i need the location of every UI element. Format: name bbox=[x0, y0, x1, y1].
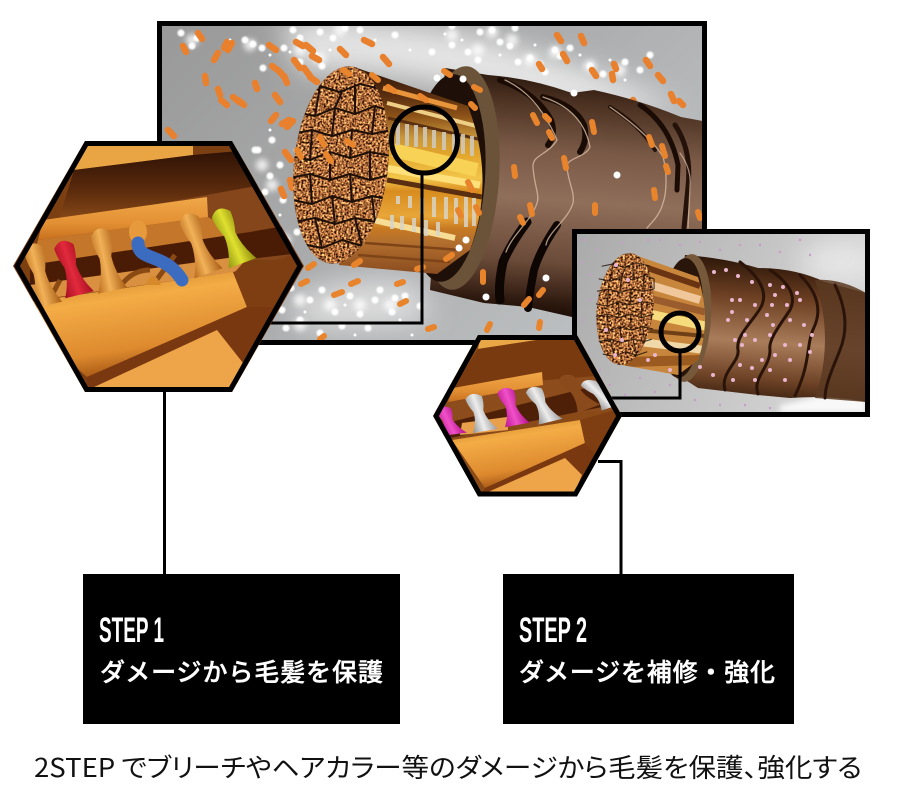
top gold band bbox=[74, 143, 193, 170]
connector: inset lens to hexagon 2 bbox=[610, 350, 680, 398]
lower gold bbox=[452, 420, 585, 488]
cuticle folds bbox=[499, 80, 690, 308]
upper rail bbox=[38, 197, 208, 240]
step 2 label: STEP 2 bbox=[519, 611, 587, 650]
inset hair body bbox=[670, 255, 866, 402]
inset frame bbox=[574, 232, 868, 414]
panel background bbox=[160, 25, 704, 342]
hair body bbox=[430, 68, 708, 317]
bottom light bbox=[486, 458, 582, 496]
panel frame bbox=[160, 24, 704, 342]
lower tiles bbox=[30, 258, 243, 297]
small white sparkles bbox=[230, 34, 625, 335]
silver proteins bbox=[460, 392, 498, 433]
pillars bbox=[552, 371, 600, 413]
pillars bbox=[25, 243, 62, 308]
yellow protein bbox=[212, 208, 256, 268]
inset ring bbox=[676, 254, 712, 382]
hexagon frame bbox=[17, 144, 300, 390]
inset pink particles bbox=[606, 265, 812, 380]
white sparkles bbox=[181, 26, 650, 333]
protein teeth upper bbox=[398, 123, 472, 156]
inset panel: repaired hair bbox=[572, 229, 880, 417]
slot bbox=[443, 385, 612, 438]
cuticle ring bbox=[438, 66, 500, 290]
main hair illustration panel bbox=[157, 19, 708, 345]
red protein bbox=[54, 240, 94, 298]
hexagon: step 1 magnified view bbox=[10, 138, 310, 394]
inset cross section bbox=[591, 250, 659, 368]
rail underside bbox=[37, 217, 236, 263]
orange particles bbox=[168, 33, 694, 196]
tiles bbox=[460, 417, 508, 435]
connector: hexagon 1 to step 1 box bbox=[163, 390, 166, 576]
dark slot bbox=[30, 225, 292, 285]
ring inner opening bbox=[426, 74, 486, 282]
bottom light panel bbox=[92, 330, 243, 392]
sparkle glow bbox=[192, 30, 620, 325]
inset core bbox=[615, 250, 715, 380]
connector: main lens to step 1 hexagon bbox=[265, 172, 422, 323]
hair core bbox=[339, 67, 482, 274]
step 2 box bbox=[503, 574, 794, 724]
lens circle bbox=[392, 107, 458, 173]
protein teeth lower bbox=[392, 196, 474, 236]
pink proteins bbox=[429, 405, 467, 436]
bottom white glitter bbox=[778, 397, 865, 412]
step 1 box bbox=[83, 574, 400, 724]
inset lens bbox=[661, 313, 699, 351]
step 1 label: STEP 1 bbox=[99, 611, 164, 650]
upper rail bbox=[448, 372, 543, 402]
hair cross section bbox=[293, 66, 390, 264]
lower right brown bbox=[233, 254, 298, 307]
inset cuticle folds bbox=[724, 262, 845, 398]
connector: hexagon 2 to step 2 box bbox=[598, 462, 621, 576]
caption: 2STEP でブリーチやヘアカラー等のダメージから毛髪を保護、強化する bbox=[34, 748, 862, 785]
step 2 description: ダメージを補修・強化 bbox=[519, 659, 775, 687]
glitter glow bottom bbox=[290, 280, 430, 329]
blue protein bbox=[138, 243, 182, 280]
step 1 description: ダメージから毛髪を保護 bbox=[100, 659, 383, 687]
frayed tip bbox=[815, 280, 866, 402]
top right light bbox=[800, 242, 880, 282]
core bars bbox=[383, 88, 457, 108]
hair orange and white particles bbox=[297, 70, 700, 339]
lower gold panel bbox=[30, 272, 247, 377]
glitter glow top bbox=[280, 19, 680, 110]
hexagon: step 2 magnified view bbox=[429, 333, 625, 498]
